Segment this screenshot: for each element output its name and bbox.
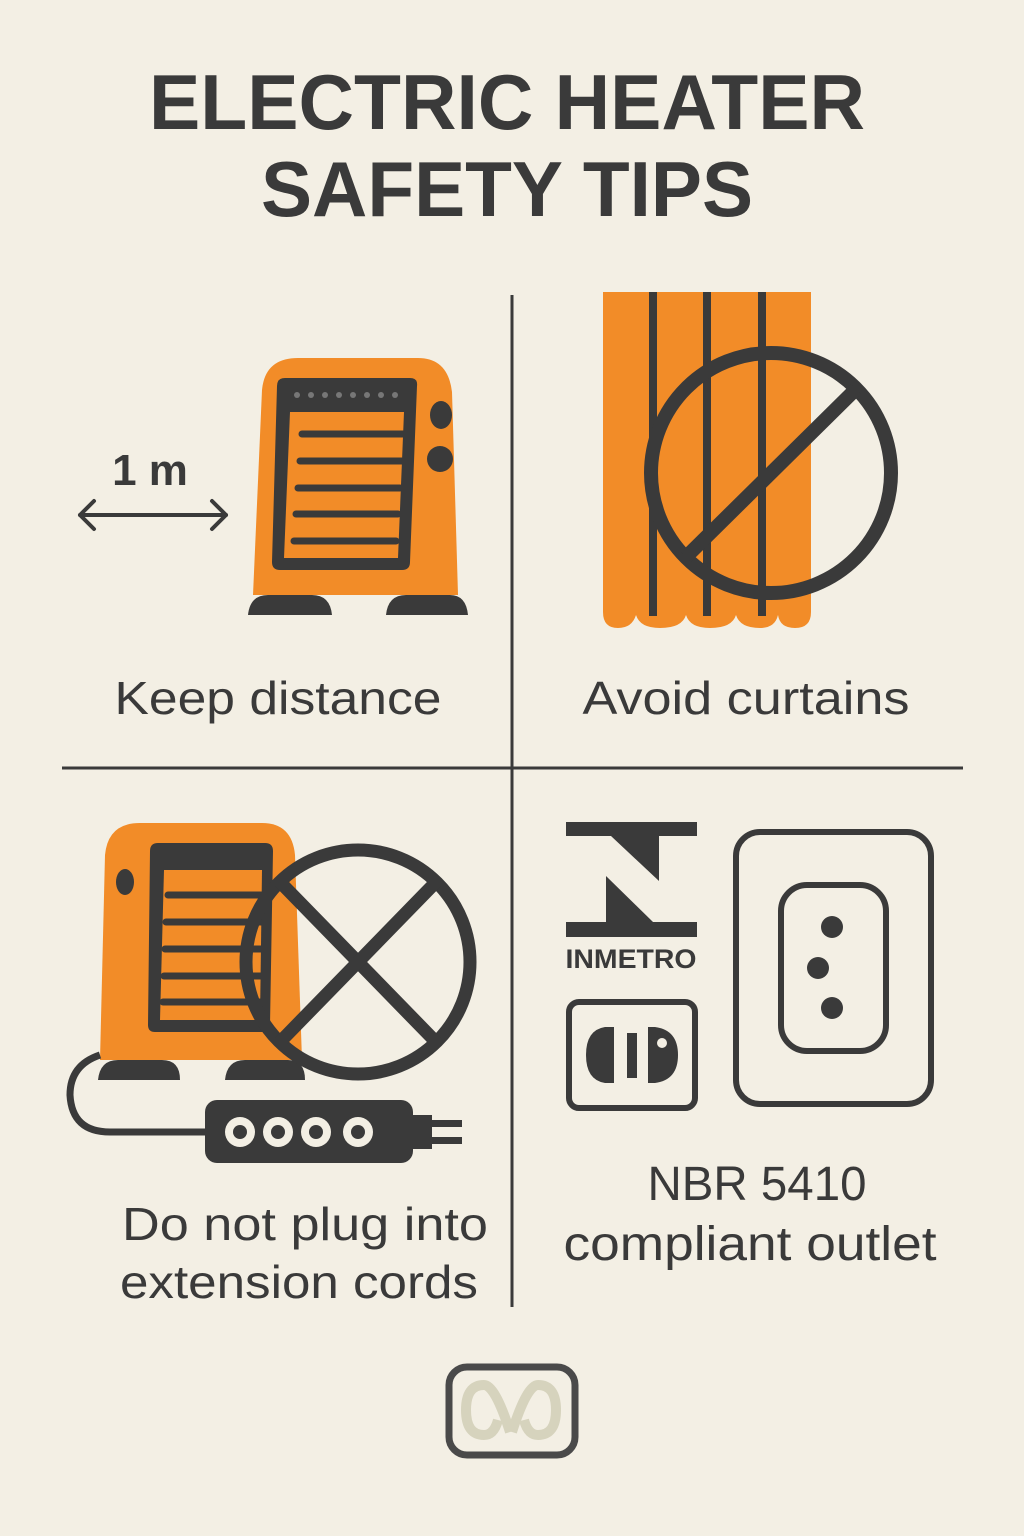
arrow: 1 m distance [80,446,226,529]
arrow: 1 m distance: 1 m [112,446,188,495]
label: NBR 5410 [648,1158,866,1211]
panel: extension cords [70,823,488,1308]
panel: compliant outlet: compliant outlet [564,1218,936,1271]
icon: heater [98,823,305,1080]
label: Avoid curtains [582,672,910,724]
panel: extension cords: extension cords [120,1256,478,1308]
icon: INMETRO logo [566,822,697,974]
icon: NBR outlet [736,832,931,1104]
label: Do not plug into [122,1198,488,1250]
title [149,58,865,233]
icon: INMETRO logo: INMETRO [566,944,696,974]
icon: small outlet [569,1002,695,1108]
title: ELECTRIC HEATER [149,58,865,146]
icon: power strip [70,1055,462,1163]
panel: keep distance [80,358,468,724]
panel: compliant outlet [564,822,936,1271]
title: SAFETY TIPS [261,145,753,233]
label: Keep distance [114,672,442,724]
icon: footer logo [449,1367,575,1455]
icon: curtain [603,292,811,628]
panel: avoid curtains [582,292,910,724]
icon: prohibition X [246,850,470,1074]
icon: prohibition [651,353,891,593]
icon: heater [248,358,468,615]
